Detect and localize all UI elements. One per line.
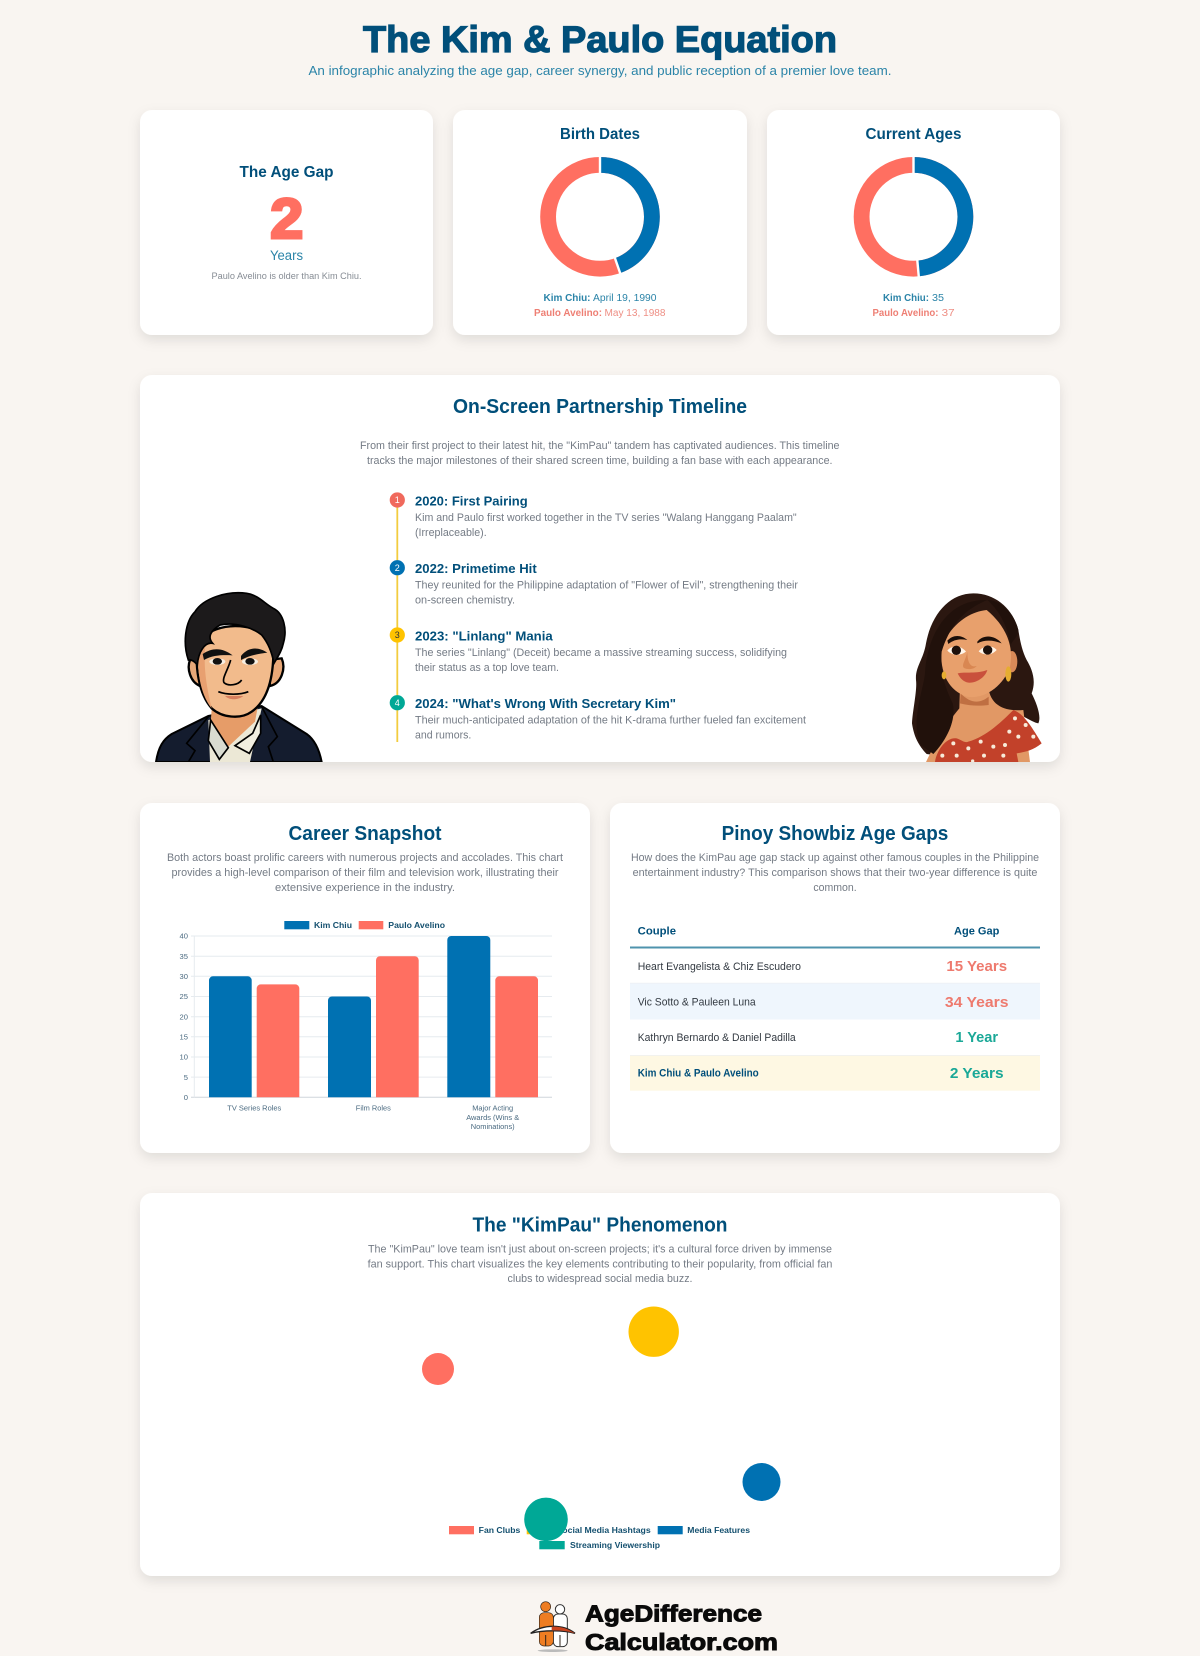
bubble: fan clubs xyxy=(422,1353,454,1385)
bubble chart legend: Media Features xyxy=(687,1525,750,1535)
timeline intro text: From their first project to their latest hit, the "KimPau" tandem has captivated audiences. This timeline xyxy=(360,440,840,452)
y axis labels: 15 xyxy=(180,1032,188,1042)
heading: birth dates: Birth Dates xyxy=(560,126,640,143)
icon: two people logo xyxy=(531,1602,575,1652)
heading: age gaps: Pinoy Showbiz Age Gaps xyxy=(722,823,948,845)
row: vic and pauleen xyxy=(630,984,1040,1020)
bubble: streaming viewership xyxy=(524,1498,568,1541)
heading: career snapshot: Career Snapshot xyxy=(288,823,442,845)
panel: pinoy showbiz age gaps xyxy=(610,803,1060,1153)
infographic canvas xyxy=(138,24,1062,1652)
career intro text: provides a high-level comparison of their film and television work, illustrating their xyxy=(172,867,559,879)
title: The Kim & Paulo Equation xyxy=(363,19,837,60)
milestone 2022: 2022: Primetime Hit xyxy=(415,561,537,576)
milestone 2022: They reunited for the Philippine adaptation of "Flower of Evil", strengthening their xyxy=(415,579,798,591)
milestone 2023: 3 xyxy=(395,630,400,640)
illustration: paulo cartoon portrait xyxy=(156,593,322,762)
timeline intro text xyxy=(360,440,840,467)
panel: career snapshot xyxy=(140,803,590,1153)
row: kathryn and daniel xyxy=(630,1029,1040,1056)
bubble chart legend: Streaming Viewership xyxy=(570,1540,660,1550)
milestone 2024 xyxy=(390,695,806,741)
row: heart and chiz xyxy=(630,958,1040,984)
age gaps intro text: entertainment industry? This comparison shows that their two-year difference is quite xyxy=(633,867,1037,879)
phenomenon intro text: The "KimPau" love team isn't just about on-screen projects; it's a cultural force driven by immense xyxy=(368,1243,832,1255)
row: kathryn and daniel: 1 Year xyxy=(955,1029,998,1046)
panel: timeline xyxy=(140,375,1060,763)
x axis labels xyxy=(227,1104,519,1131)
chart legend xyxy=(284,920,445,930)
y axis labels: 0 xyxy=(184,1093,188,1102)
timeline connector line xyxy=(396,500,398,742)
phenomenon intro text: fan support. This chart visualizes the key elements contributing to their popularity, from official fan xyxy=(368,1258,832,1270)
y axis labels: 30 xyxy=(180,972,188,981)
milestone 2024: Their much-anticipated adaptation of the hit K-drama further fueled fan excitement xyxy=(415,714,806,726)
row: heart and chiz: 15 Years xyxy=(946,958,1007,975)
milestone 2020 xyxy=(390,492,797,539)
age gap note: Paulo Avelino is older than Kim Chiu. xyxy=(212,271,362,282)
row: vic and pauleen: 34 Years xyxy=(945,994,1009,1011)
legend: kim birth date: April 19, 1990 xyxy=(593,293,657,304)
panel: birth dates xyxy=(453,110,747,335)
row: heart and chiz: Heart Evangelista & Chiz Escudero xyxy=(638,961,801,973)
table: couples comparison xyxy=(630,925,1040,1091)
panel: current ages xyxy=(767,110,1060,335)
y axis labels: 5 xyxy=(184,1073,188,1082)
subtitle: An infographic analyzing the age gap, career synergy, and public reception of a premier love team. xyxy=(308,63,892,78)
milestone 2022 xyxy=(390,560,798,607)
career intro text: Both actors boast prolific careers with numerous projects and accolades. This chart xyxy=(167,852,563,864)
legend: kim age: 35 xyxy=(932,293,944,304)
milestone 2023: The series "Linlang" (Deceit) became a massive streaming success, solidifying xyxy=(415,647,787,659)
legend: paulo age: 37 xyxy=(942,308,955,319)
age gaps intro text xyxy=(631,852,1039,894)
milestone 2024: 2024: "What's Wrong With Secretary Kim" xyxy=(415,696,676,711)
bar chart: career comparison xyxy=(180,920,552,1131)
donut chart: birth dates xyxy=(548,155,652,275)
milestone 2020: 2020: First Pairing xyxy=(415,494,528,509)
bubble: media features xyxy=(742,1463,780,1501)
bubble chart legend: Fan Clubs xyxy=(479,1525,521,1535)
x axis labels: Awards (Wins & xyxy=(466,1113,519,1122)
y axis labels: 35 xyxy=(180,952,188,961)
y axis labels: 40 xyxy=(180,932,188,941)
milestone 2024: 4 xyxy=(395,698,400,708)
illustration: kim cartoon portrait xyxy=(912,593,1042,763)
row: kathryn and daniel: Kathryn Bernardo & Daniel Padilla xyxy=(638,1032,796,1044)
heading: timeline: On-Screen Partnership Timeline xyxy=(453,396,747,418)
x axis labels: Film Roles xyxy=(356,1104,391,1113)
x axis labels: Major Acting xyxy=(472,1104,513,1113)
y axis labels: 25 xyxy=(180,992,188,1001)
table header: Age Gap xyxy=(954,925,1000,937)
y axis labels: 20 xyxy=(180,1012,188,1021)
logo wordmark: AgeDifference xyxy=(585,1601,762,1627)
milestone 2023: 2023: "Linlang" Mania xyxy=(415,629,553,644)
milestone 2020: 1 xyxy=(395,495,400,505)
milestone 2022: on-screen chemistry. xyxy=(415,595,515,607)
panel: the age gap xyxy=(140,110,433,335)
heading: current ages: Current Ages xyxy=(866,126,962,143)
logo wordmark line 2: Calculator.com xyxy=(585,1629,778,1655)
age gaps intro text: How does the KimPau age gap stack up against other famous couples in the Philippine xyxy=(631,852,1039,864)
career intro text xyxy=(167,852,563,894)
row: kim and paulo highlight xyxy=(630,1056,1040,1091)
legend: paulo age: Paulo Avelino: xyxy=(872,308,938,319)
heading: phenomenon: The "KimPau" Phenomenon xyxy=(472,1215,728,1237)
legend: paulo birth date xyxy=(534,308,666,319)
age gaps intro text: common. xyxy=(813,882,857,894)
years label: Years xyxy=(270,248,303,263)
footer logo xyxy=(531,1601,778,1655)
chart legend: Kim Chiu xyxy=(314,920,352,930)
bubble: social media hashtags xyxy=(628,1306,679,1357)
phenomenon intro text xyxy=(368,1243,832,1285)
donut chart: current ages xyxy=(862,155,965,278)
heading: the age gap: The Age Gap xyxy=(240,164,334,181)
milestone 2022: 2 xyxy=(395,563,400,573)
table header: Couple xyxy=(638,925,676,937)
milestone 2020: Kim and Paulo first worked together in the TV series "Walang Hanggang Paalam" xyxy=(415,512,797,524)
phenomenon intro text: clubs to widespread social media buzz. xyxy=(508,1273,692,1285)
row: vic and pauleen: Vic Sotto & Pauleen Luna xyxy=(638,997,756,1009)
legend: paulo birth date: May 13, 1988 xyxy=(604,308,666,319)
timeline intro text: tracks the major milestones of their shared screen time, building a fan base with each appearance. xyxy=(367,455,832,467)
legend: paulo birth date: Paulo Avelino: xyxy=(534,308,602,319)
milestone 2023 xyxy=(390,627,787,674)
big number 2: 2 xyxy=(270,187,303,251)
row: kim and paulo highlight: Kim Chiu & Paulo Avelino xyxy=(638,1068,759,1080)
milestone 2020: (Irreplaceable). xyxy=(415,527,487,539)
x axis labels: Nominations) xyxy=(471,1122,515,1131)
bubble chart legend: Social Media Hashtags xyxy=(556,1525,651,1535)
legend: kim age: Kim Chiu: xyxy=(883,293,929,304)
row: kim and paulo highlight: 2 Years xyxy=(950,1065,1004,1082)
y axis labels xyxy=(180,932,188,1102)
milestone 2023: their status as a top love team. xyxy=(415,662,559,674)
bubble chart legend xyxy=(449,1525,750,1550)
career intro text: extensive experience in the industry. xyxy=(275,882,455,894)
x axis labels: TV Series Roles xyxy=(227,1104,281,1113)
legend: kim birth date: Kim Chiu: xyxy=(544,293,590,304)
table header xyxy=(630,925,1040,948)
legend: kim birth date xyxy=(544,293,657,304)
y axis labels: 10 xyxy=(180,1053,188,1062)
chart legend: Paulo Avelino xyxy=(388,920,445,930)
milestone 2024: and rumors. xyxy=(415,729,471,741)
panel: kimpau phenomenon xyxy=(140,1193,1060,1576)
bars xyxy=(209,936,538,1097)
